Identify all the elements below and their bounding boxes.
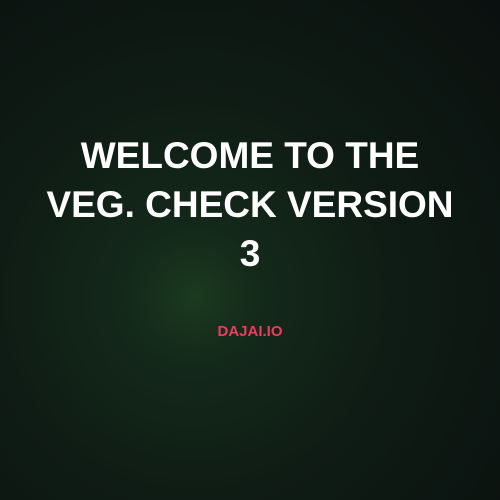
brand label: DAJAI.IO	[217, 323, 282, 340]
title	[46, 135, 454, 274]
title: 3	[240, 233, 260, 274]
title: WELCOME TO THE	[81, 135, 419, 176]
title: VEG. CHECK VERSION	[46, 184, 454, 225]
